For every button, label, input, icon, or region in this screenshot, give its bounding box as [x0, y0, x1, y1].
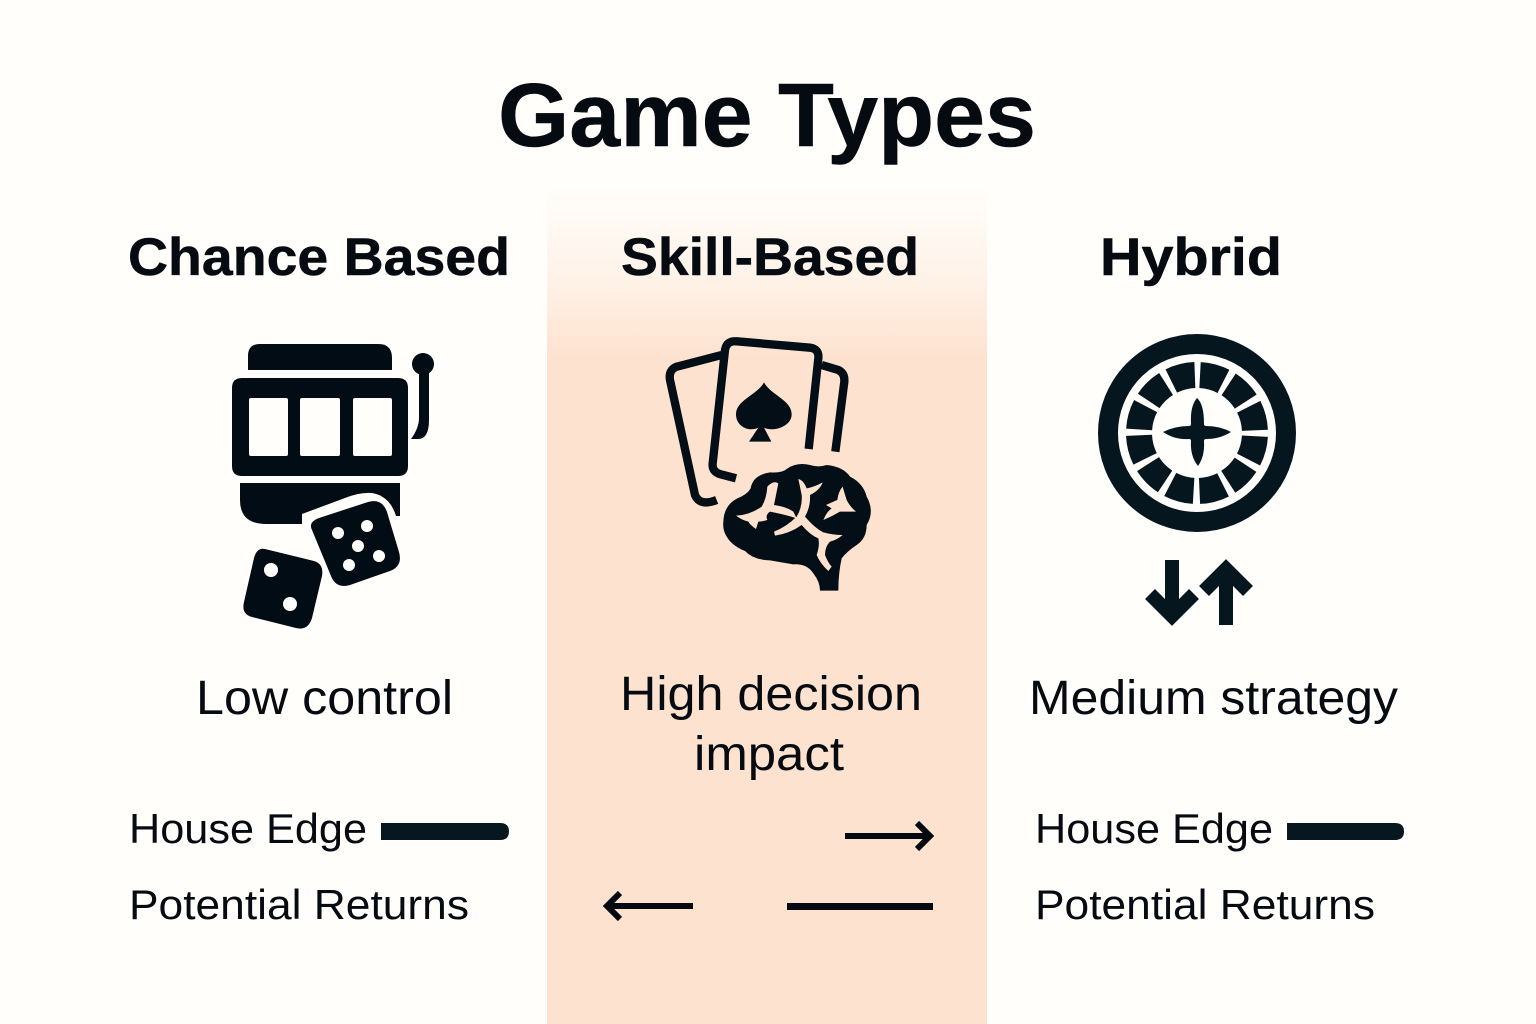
label: high decision impact [620, 668, 922, 781]
metric: house edge: House Edge [1035, 805, 1273, 852]
label: medium strategy: Medium strategy [1029, 672, 1398, 725]
heading: hybrid: Hybrid [1100, 228, 1282, 287]
bar: potential returns line [787, 903, 933, 910]
heading: skill-based: Skill-Based [621, 228, 919, 287]
metric: house edge [129, 805, 509, 852]
icon: cards and brain [670, 341, 871, 591]
metric: house edge [1035, 805, 1404, 852]
icon: down and up arrows [1150, 560, 1248, 625]
column: chance based [128, 228, 510, 928]
label: high decision impact: High decision [620, 668, 922, 721]
heading: chance based: Chance Based [128, 228, 510, 287]
column: skill-based [607, 228, 933, 919]
icon: roulette wheel [1108, 344, 1286, 522]
panel: skill-based highlight column [547, 185, 987, 1024]
title: Game Types [498, 66, 1036, 166]
metric: potential returns: Potential Returns [129, 881, 469, 928]
metric: house edge: House Edge [129, 805, 367, 852]
icon: slot machine with dice [232, 344, 434, 629]
metric: potential returns: Potential Returns [1035, 881, 1375, 928]
column: hybrid [1029, 228, 1404, 928]
arrow: left, potential returns [607, 893, 693, 919]
label: low control: Low control [196, 672, 453, 725]
label: high decision impact: impact [694, 728, 844, 781]
arrow: right, house edge [845, 823, 930, 849]
